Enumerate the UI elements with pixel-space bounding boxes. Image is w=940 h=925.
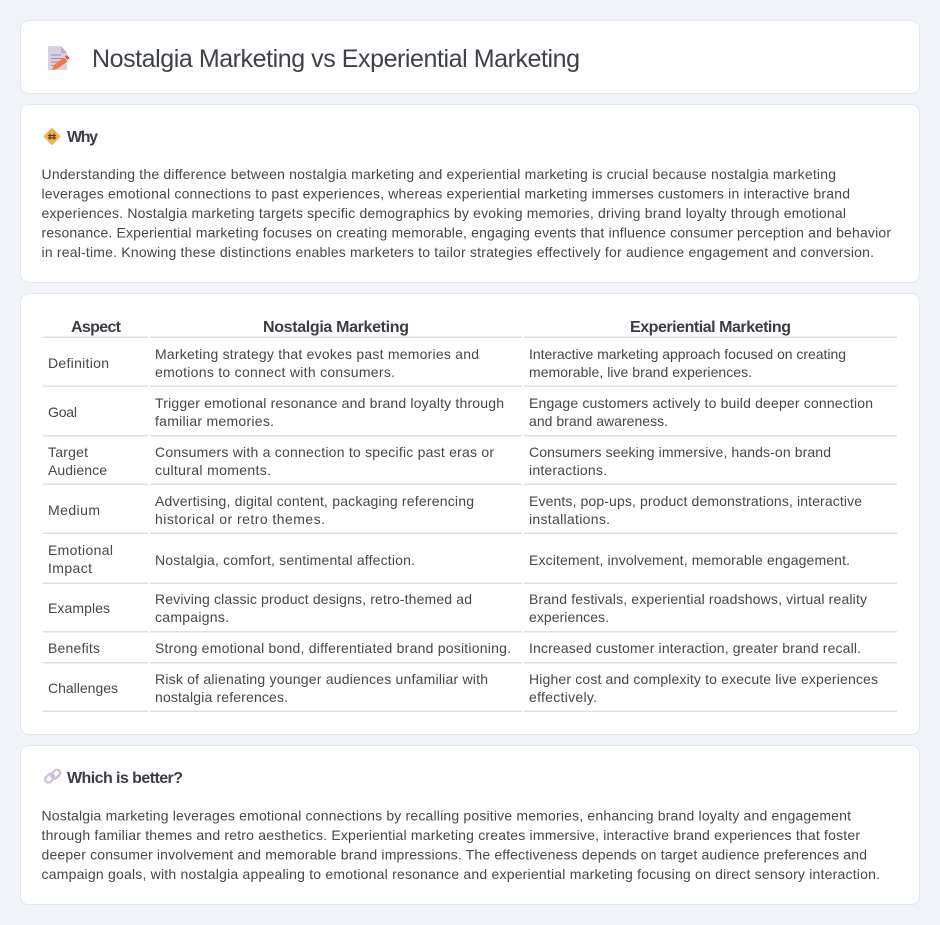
icon: document with pencil (48, 46, 70, 70)
panel: why (20, 104, 920, 282)
row: challenges (43, 671, 897, 712)
row: target audience: Target (48, 444, 88, 460)
row: goal: Engage customers actively to build deeper connection (529, 395, 873, 411)
row: examples (43, 591, 897, 632)
icon: warning diamond (44, 128, 60, 144)
row: challenges: Risk of alienating younger audiences unfamiliar with (155, 671, 488, 687)
row: emotional impact: Impact (48, 560, 92, 576)
row: challenges: effectively. (529, 689, 597, 705)
text block: why paragraph: resonance. Experiential marketing focuses on creating memorable, engaging events that influence consumer perception and behavior (42, 225, 891, 241)
row: medium: Events, pop-ups, product demonstrations, interactive (529, 493, 862, 509)
row: medium: historical or retro themes. (155, 511, 325, 527)
row: benefits: Benefits (48, 640, 100, 656)
row: target audience: Consumers seeking immersive, hands-on brand (529, 444, 831, 460)
row: definition (43, 346, 897, 387)
text block: which paragraph: through familiar themes and retro aesthetics. Experiential marketing creates immersive, interactive brand experiences that foster (42, 827, 860, 843)
icon: link (44, 768, 62, 784)
heading: why: Why (67, 129, 98, 146)
text block: which paragraph (42, 808, 880, 882)
row: examples: experiences. (529, 609, 609, 625)
table header: Experiential Marketing (630, 319, 791, 336)
row: emotional impact: Excitement, involvement, memorable engagement. (529, 552, 850, 568)
row: goal: familiar memories. (155, 413, 274, 429)
row: challenges: nostalgia references. (155, 689, 288, 705)
row: definition: emotions to connect with consumers. (155, 364, 395, 380)
row: target audience: Audience (48, 462, 107, 478)
row: challenges: Higher cost and complexity to execute live experiences (529, 671, 878, 687)
panel: which is better (20, 746, 920, 904)
row: examples: Brand festivals, experiential roadshows, virtual reality (529, 591, 867, 607)
text block: why paragraph: in real-time. Knowing these distinctions enables marketers to tailor strategies effectively for audience engagement and conversion. (42, 244, 874, 260)
row: target audience (43, 444, 897, 485)
row: emotional impact: Nostalgia, comfort, sentimental affection. (155, 552, 415, 568)
text block: why paragraph: Understanding the difference between nostalgia marketing and experiential marketing is crucial because nostalgia marketing (42, 166, 836, 182)
table header (43, 319, 897, 338)
row: examples: Reviving classic product designs, retro-themed ad (155, 591, 472, 607)
row: benefits: Increased customer interaction, greater brand recall. (529, 640, 861, 656)
row: definition: Marketing strategy that evokes past memories and (155, 346, 479, 362)
row: target audience: interactions. (529, 462, 607, 478)
row: benefits: Strong emotional bond, differentiated brand positioning. (155, 640, 511, 656)
text block: why paragraph: leverages emotional connections to past experiences, whereas experiential marketing immerses customers in interactive brand (42, 186, 850, 202)
table header: Aspect (71, 319, 122, 336)
text block: why paragraph (42, 166, 891, 260)
row: definition: memorable, live brand experiences. (529, 364, 752, 380)
row: benefits (43, 640, 897, 664)
row: examples: campaigns. (155, 609, 229, 625)
row: target audience: cultural moments. (155, 462, 271, 478)
text block: which paragraph: Nostalgia marketing leverages emotional connections by recalling positive memories, enhancing brand loyalty and engagement (42, 808, 851, 824)
row: medium: Medium (48, 502, 100, 518)
text block: why paragraph: experiences. Nostalgia marketing targets specific demographics by evoking memories, driving brand loyalty through emotional (42, 205, 846, 221)
table header: Nostalgia Marketing (263, 319, 409, 336)
row: target audience: Consumers with a connection to specific past eras or (155, 444, 494, 460)
text block: which paragraph: campaign goals, with nostalgia appealing to emotional resonance and experiential marketing focusing on direct sensory interaction. (42, 866, 880, 882)
row: definition: Definition (48, 355, 109, 371)
row: goal (43, 395, 897, 436)
row: examples: Examples (48, 600, 110, 616)
row: emotional impact (43, 542, 897, 584)
title: Nostalgia Marketing vs Experiential Marketing (92, 45, 580, 73)
panel: title header (20, 20, 920, 94)
text block: which paragraph: deeper consumer involvement and memorable brand impressions. The effectiveness depends on target audience preferences and (42, 846, 867, 862)
row: definition: Interactive marketing approach focused on creating (529, 346, 846, 362)
heading: which is better: Which is better? (67, 770, 183, 787)
row: goal: Goal (48, 404, 77, 420)
row: goal: and brand awareness. (529, 413, 668, 429)
row: medium: installations. (529, 511, 610, 527)
row: medium (43, 493, 897, 534)
row: medium: Advertising, digital content, packaging referencing (155, 493, 474, 509)
panel: comparison table (20, 294, 920, 734)
row: goal: Trigger emotional resonance and brand loyalty through (155, 395, 504, 411)
row: challenges: Challenges (48, 680, 118, 696)
row: emotional impact: Emotional (48, 542, 113, 558)
